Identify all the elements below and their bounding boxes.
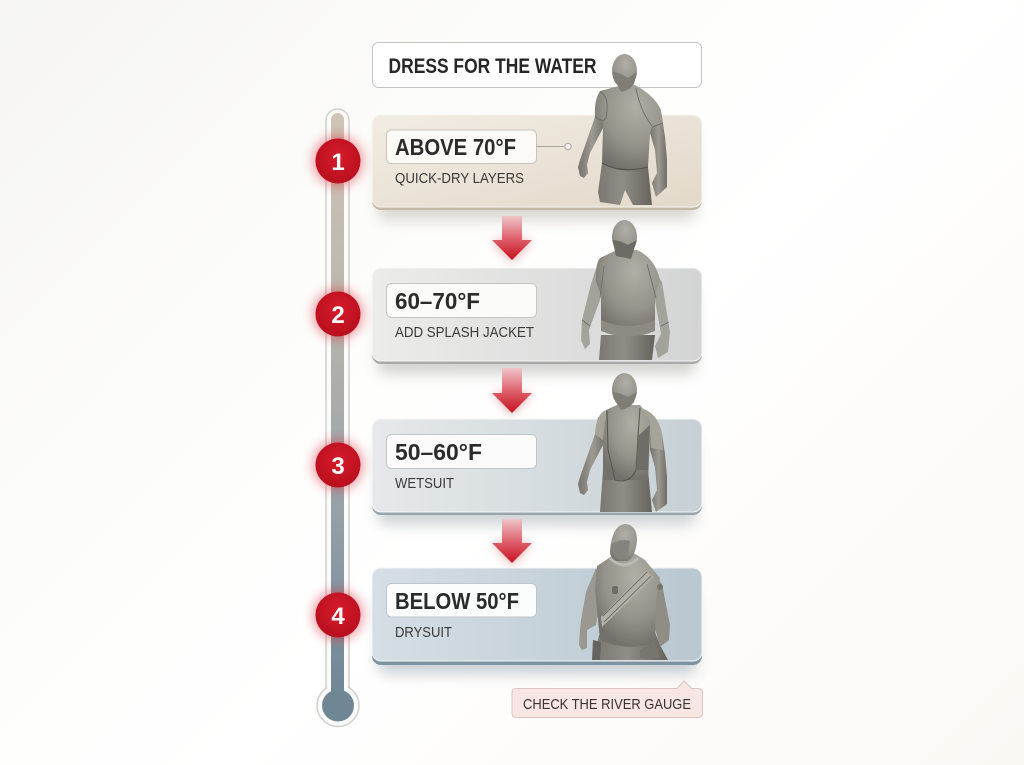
figure: drysuit	[579, 524, 670, 660]
thermometer	[317, 109, 359, 726]
gear text: add splash jacket: ADD SPLASH JACKET	[395, 325, 534, 341]
callout: check the river gauge	[512, 681, 702, 718]
temperature label: 60-70F	[386, 284, 536, 318]
panel: 60-70F	[372, 268, 702, 374]
step badge 1: 1	[331, 149, 345, 176]
temperature label: above 70F: ABOVE 70°F	[395, 134, 516, 160]
step badge 4: 4	[331, 603, 345, 630]
panel: above 70F	[372, 115, 702, 220]
gear text: quick-dry layers: QUICK-DRY LAYERS	[395, 171, 524, 187]
step badge 3: 3	[331, 453, 345, 480]
gear text: wetsuit: WETSUIT	[395, 476, 454, 492]
step badge 1	[312, 135, 364, 187]
title box	[372, 42, 702, 88]
title box: DRESS FOR THE WATER	[388, 54, 597, 78]
temperature label: 50-60F	[386, 434, 536, 468]
temperature label: 50-60F: 50–60°F	[395, 439, 482, 465]
figure: t-shirt and shorts	[578, 54, 667, 205]
step badge 2	[312, 288, 364, 340]
temperature label: below 50F: BELOW 50°F	[395, 588, 519, 614]
panel: 50-60F	[372, 419, 702, 525]
figure: wetsuit	[578, 373, 667, 512]
connector line	[536, 143, 571, 150]
step badge 2: 2	[331, 302, 345, 329]
figure: splash jacket	[581, 220, 670, 360]
step badge 4	[312, 589, 364, 641]
temperature label: 60-70F: 60–70°F	[395, 288, 480, 314]
arrow 3	[492, 519, 532, 565]
arrow 2	[492, 368, 532, 415]
arrow 1	[492, 216, 532, 262]
gear text: drysuit: DRYSUIT	[395, 625, 452, 641]
callout: check the river gauge: CHECK THE RIVER GAUGE	[523, 696, 691, 713]
step badge 3	[312, 439, 364, 491]
panel: below 50F	[372, 568, 702, 674]
